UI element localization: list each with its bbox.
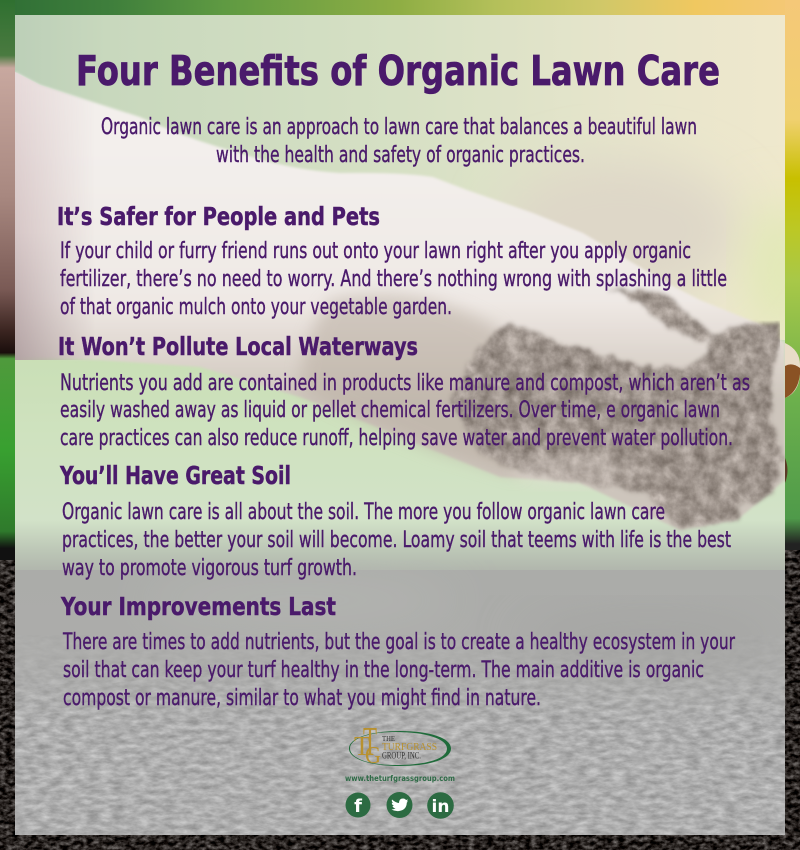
logo: The Turfgrass Group — [349, 718, 451, 769]
intro text: with the health and safety of organic practices. — [216, 142, 585, 168]
logo: The Turfgrass Group: T — [354, 731, 370, 761]
heading: It Won’t Pollute Local Waterways — [58, 332, 418, 361]
logo: The Turfgrass Group: THE — [382, 735, 395, 743]
icon: linkedin — [427, 792, 454, 819]
body text: way to promote vigorous turf growth. — [62, 555, 357, 581]
heading: You’ll Have Great Soil — [59, 461, 291, 490]
section: local waterways — [58, 332, 750, 451]
icon: twitter — [386, 792, 412, 818]
website url: www.theturfgrassgroup.com — [345, 774, 455, 783]
heading: Your Improvements Last — [60, 592, 336, 621]
intro text — [101, 114, 697, 168]
icon: linkedin: in — [432, 797, 449, 817]
body text — [62, 629, 736, 711]
logo: The Turfgrass Group: T — [363, 718, 377, 764]
icon: facebook — [346, 792, 370, 818]
heading: It’s Safer for People and Pets — [57, 202, 380, 231]
icon: facebook: f — [354, 796, 362, 817]
body text: compost or manure, similar to what you might find in nature. — [63, 685, 541, 711]
body text — [62, 499, 731, 581]
section: great soil — [59, 461, 731, 581]
section: safer for people and pets — [57, 202, 727, 320]
body text — [60, 238, 727, 320]
logo: The Turfgrass Group: TURFGRASS — [382, 742, 437, 753]
logo: The Turfgrass Group: G — [365, 743, 381, 769]
body text: of that organic mulch onto your vegetable garden. — [60, 294, 452, 320]
section: improvements last — [60, 592, 736, 711]
body text — [60, 370, 750, 451]
logo: The Turfgrass Group: GROUP, INC. — [382, 750, 421, 760]
